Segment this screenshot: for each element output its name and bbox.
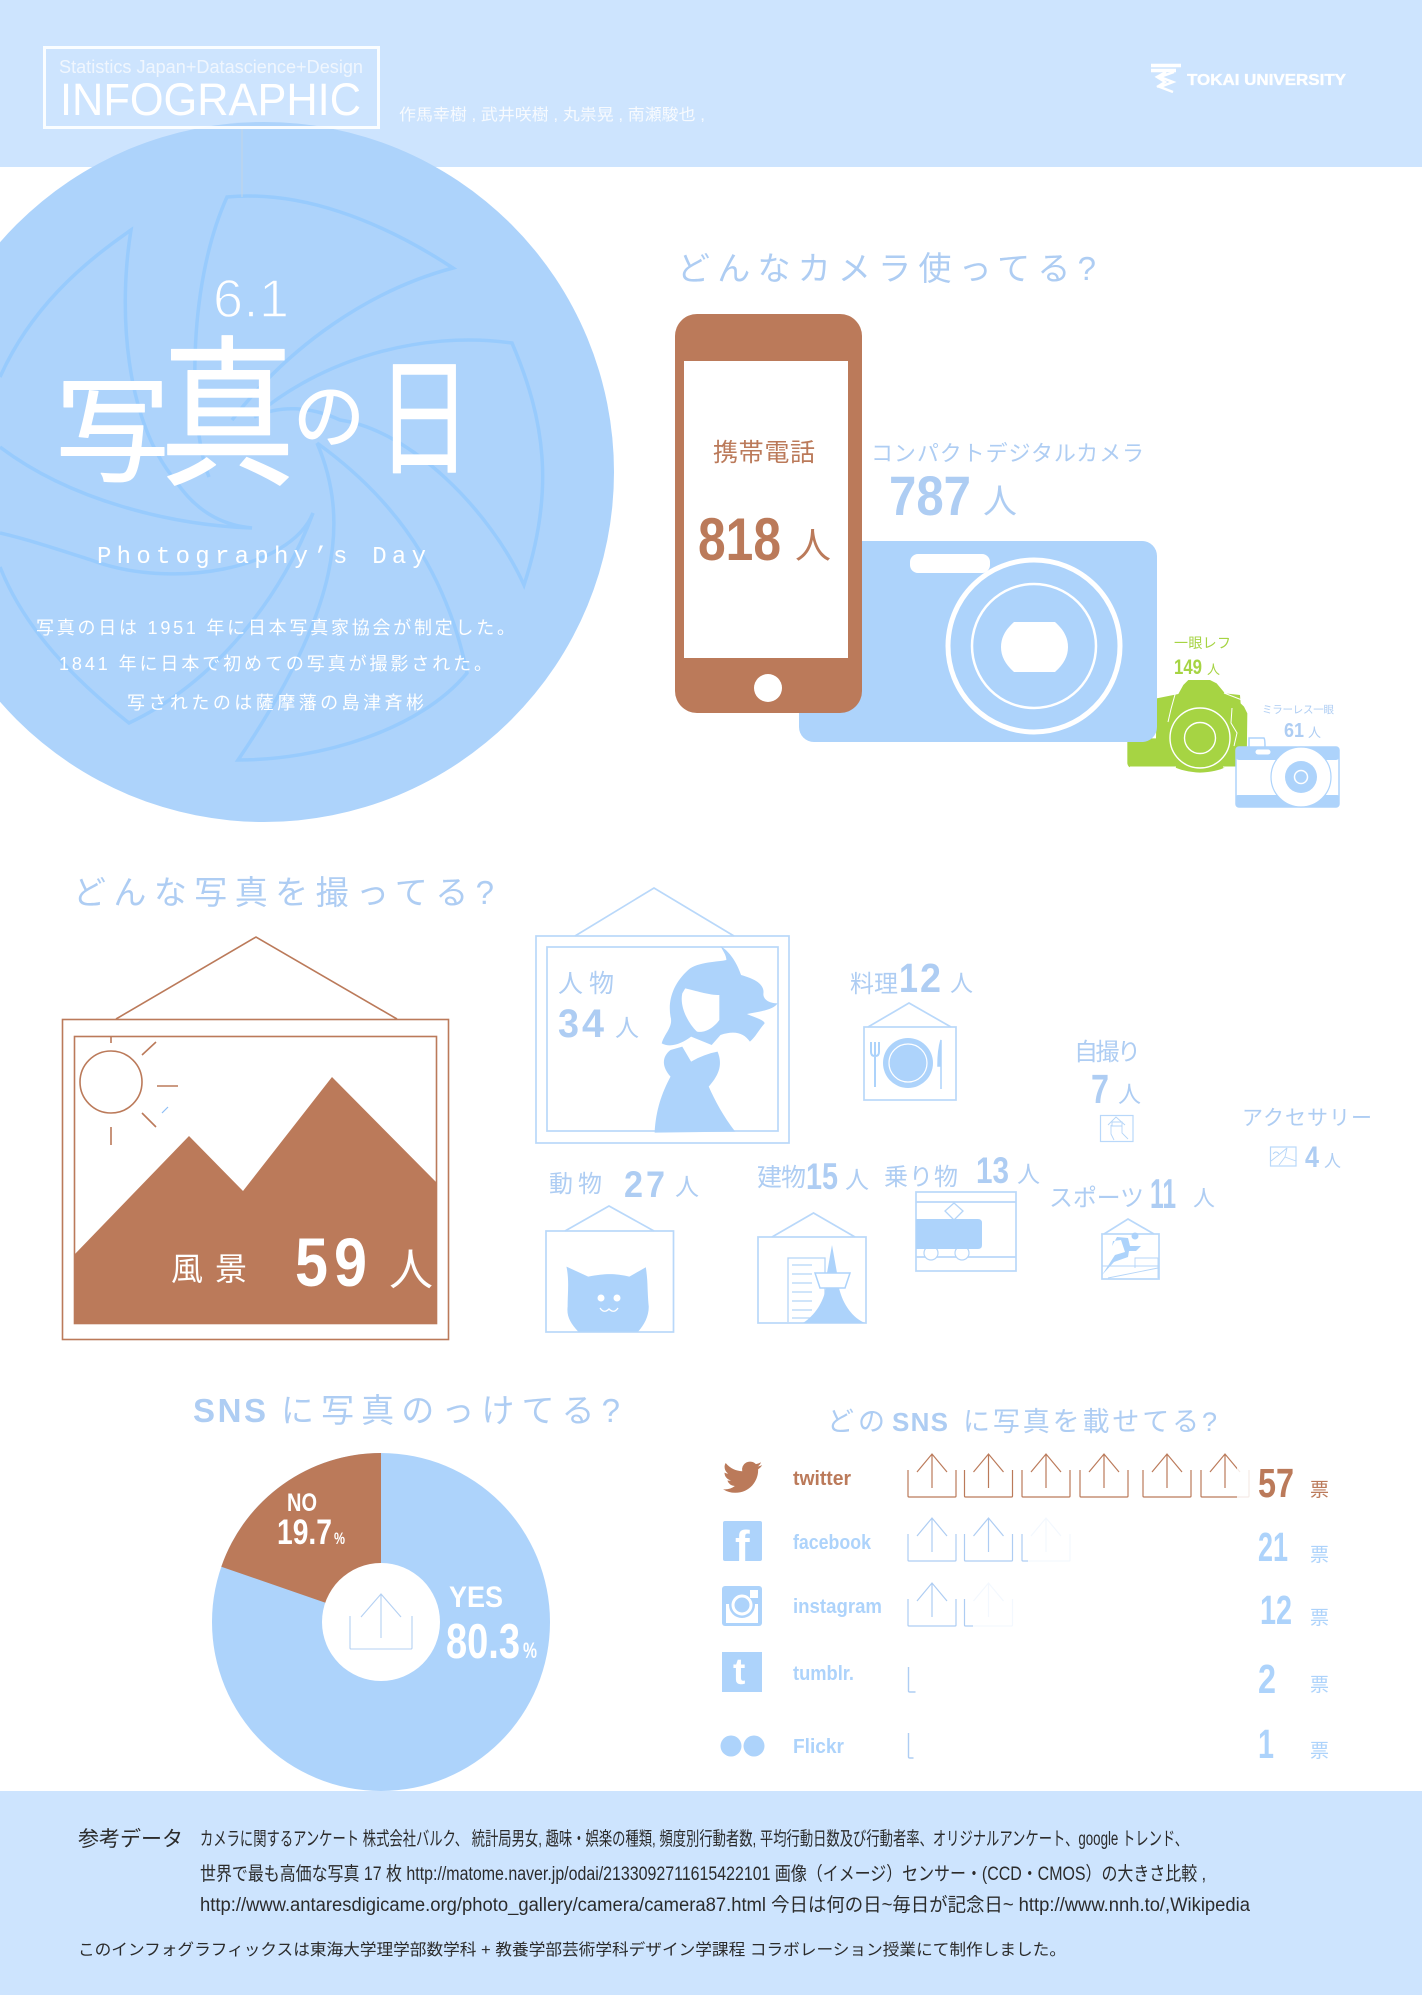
sports label: スポーツ xyxy=(1049,1185,1144,1212)
building label xyxy=(757,1156,869,1197)
row: tumblr: t xyxy=(733,1651,745,1692)
label: DSLR: 149 xyxy=(1174,656,1202,679)
row: twitter: 票 xyxy=(1310,1480,1329,1501)
landscape frame xyxy=(62,937,448,1340)
heading xyxy=(827,1407,1217,1437)
portrait label: 3 xyxy=(558,1002,579,1046)
row: tumblr: 票 xyxy=(1310,1675,1329,1696)
food label xyxy=(850,955,973,1001)
label: compact camera xyxy=(871,441,1144,527)
label: mobile phone: 818 xyxy=(698,506,781,573)
label: mirrorless xyxy=(1262,704,1334,742)
landscape label: 9 xyxy=(334,1224,367,1301)
accessory label: 人 xyxy=(1324,1152,1341,1171)
title 写真の日: の xyxy=(293,378,365,458)
accessory label: アクセサリー xyxy=(1242,1107,1372,1130)
description text: 写されたのは薩摩藩の島津斉彬 xyxy=(127,693,424,713)
icon: DSLR xyxy=(1127,680,1247,773)
label: compact camera: 787 xyxy=(889,464,971,527)
row: twitter: twitter xyxy=(793,1468,851,1490)
row: facebook xyxy=(723,1516,1329,1571)
animal label xyxy=(549,1164,699,1205)
description text: 写真の日は 1951 年に日本写真家協会が制定した。 xyxy=(36,618,515,638)
sports label: 11 xyxy=(1150,1170,1176,1217)
label: DSLR xyxy=(1174,635,1231,679)
title 写真の日: 写 xyxy=(55,369,170,497)
row: facebook: 21 xyxy=(1258,1524,1288,1570)
heading: SNS xyxy=(193,1392,266,1429)
panel: SNS yes/no xyxy=(193,1392,620,1791)
label: mobile phone: 携帯電話 xyxy=(713,439,815,467)
date 6.1: 6.1 xyxy=(213,269,289,329)
references xyxy=(78,1828,1250,1959)
silhouette xyxy=(655,946,778,1133)
panel: camera usage xyxy=(675,250,1339,807)
aperture circle xyxy=(0,122,614,822)
portrait label: 人 xyxy=(615,1015,639,1042)
logo title: INFOGRAPHIC xyxy=(60,74,361,125)
yes label: YES xyxy=(449,1581,503,1614)
heading: に写真を載せてる? xyxy=(963,1407,1217,1437)
vehicle label: 人 xyxy=(1017,1161,1040,1187)
description text xyxy=(36,618,515,713)
title 写真の日: 日 xyxy=(376,348,472,491)
row: tumblr xyxy=(722,1651,1329,1702)
label: mirrorless: ミラーレス一眼 xyxy=(1262,704,1334,716)
animal label: 人 xyxy=(675,1174,699,1201)
selfie frame xyxy=(1074,1039,1141,1142)
sports label xyxy=(1049,1170,1215,1217)
aperture blades xyxy=(0,196,543,760)
label: mobile phone xyxy=(698,439,831,573)
panel: photo subjects xyxy=(62,874,1372,1340)
yes label: % xyxy=(523,1638,537,1663)
heading: どんなカメラ使ってる? xyxy=(677,250,1096,287)
animal label: 7 xyxy=(646,1164,665,1205)
landscape label: 人 xyxy=(389,1246,433,1295)
landscape label xyxy=(171,1224,433,1301)
animal label: 動物 xyxy=(549,1171,602,1198)
selfie label: 人 xyxy=(1118,1081,1141,1107)
panel: aperture circle with title xyxy=(0,122,614,822)
footer band xyxy=(0,1791,1422,1995)
description text: 1841 年に日本で初めての写真が撮影された。 xyxy=(59,654,492,674)
row: instagram: 12 xyxy=(1260,1587,1292,1633)
pie chart xyxy=(212,1453,550,1791)
label: DSLR: 人 xyxy=(1207,662,1220,677)
building label: 人 xyxy=(845,1167,869,1194)
landscape label: 5 xyxy=(295,1224,328,1301)
label: mobile phone: 人 xyxy=(795,525,831,566)
title 写真の日 xyxy=(55,325,472,507)
food frame xyxy=(850,955,973,1100)
no label: 19.7 xyxy=(277,1513,332,1552)
selfie label xyxy=(1074,1039,1141,1112)
selfie label: 自撮り xyxy=(1074,1039,1141,1066)
portrait frame xyxy=(536,888,789,1143)
animal frame xyxy=(546,1164,699,1332)
sports label: 人 xyxy=(1193,1186,1215,1211)
heading: SNS xyxy=(892,1407,948,1437)
row: flickr: 1 xyxy=(1258,1721,1274,1767)
row: facebook: 票 xyxy=(1310,1545,1329,1566)
panel: SNS ranking xyxy=(720,1407,1329,1767)
no label: % xyxy=(334,1529,345,1548)
university logo: TOKAI UNIVERSITY xyxy=(1187,72,1347,89)
icon: smartphone xyxy=(675,314,862,713)
row: flickr xyxy=(720,1721,1329,1767)
authors: 作馬幸樹 , 武井咲樹 , 丸祟晃 , 南瀬駿也 , xyxy=(399,106,705,124)
row: twitter: 57 xyxy=(1258,1460,1294,1506)
food label: 2 xyxy=(920,955,941,1001)
yes label: 80.3 xyxy=(446,1615,520,1669)
food label: 人 xyxy=(950,970,973,996)
credit line: このインフォグラフィックスは東海大学理学部数学科 + 教養学部芸術学科デザイン学課程 コラボレーション授業にて制作しました。 xyxy=(78,1940,1066,1959)
vehicle label: 乗り物 xyxy=(884,1164,958,1191)
no label: NO xyxy=(287,1489,317,1517)
icon: upload xyxy=(350,1594,412,1649)
portrait label xyxy=(558,970,639,1046)
row: flickr: 票 xyxy=(1310,1741,1329,1762)
food label: 料理 xyxy=(850,971,898,998)
university logo xyxy=(1151,66,1347,92)
title 写真の日: 真 xyxy=(160,325,295,507)
building frame xyxy=(757,1156,869,1323)
references heading: 参考データ xyxy=(78,1828,183,1851)
icon: compact camera xyxy=(799,541,1157,742)
row: facebook: f xyxy=(735,1522,750,1571)
accessory label: 4 xyxy=(1305,1141,1319,1174)
selfie label: 7 xyxy=(1091,1066,1109,1112)
yes label xyxy=(446,1581,537,1669)
subtitle: Photography’s Day xyxy=(97,544,426,571)
animal label: 2 xyxy=(624,1164,643,1205)
row: instagram: instagram xyxy=(793,1596,882,1618)
portrait label: 4 xyxy=(582,1002,605,1046)
label: mirrorless: 人 xyxy=(1308,725,1321,740)
header logo box xyxy=(44,48,378,128)
references text: http://www.antaresdigicame.org/photo_gallery/camera/camera87.html 今日は何の日~毎日が記念日~ http://www.nnh.to/,Wikipedia xyxy=(200,1894,1250,1916)
row: instagram: 票 xyxy=(1310,1608,1329,1629)
heading: どの xyxy=(827,1407,885,1437)
vehicle label: 13 xyxy=(976,1150,1009,1191)
header band xyxy=(0,0,1422,167)
accessory label xyxy=(1242,1107,1372,1174)
row: tumblr: 2 xyxy=(1258,1656,1276,1702)
label: DSLR: 一眼レフ xyxy=(1174,635,1231,651)
row: flickr: Flickr xyxy=(793,1736,844,1758)
references text: 世界で最も高価な写真 17 枚 http://matome.naver.jp/odai/2133092711615422101 画像（イメージ）センサー・(CCD・CMOS）の大きさ比較 , xyxy=(200,1863,1206,1885)
food label: 1 xyxy=(899,955,918,1001)
row: tumblr: tumblr. xyxy=(793,1663,854,1685)
icon: mirrorless camera xyxy=(1236,738,1339,807)
label: mirrorless: 61 xyxy=(1284,720,1304,742)
building label: 建物 xyxy=(757,1164,806,1192)
portrait label: 人物 xyxy=(558,970,614,998)
sports frame xyxy=(1049,1170,1215,1279)
building label: 15 xyxy=(806,1156,838,1197)
row: facebook: facebook xyxy=(793,1532,872,1554)
heading: に写真のっけてる? xyxy=(281,1392,620,1429)
vehicle frame xyxy=(884,1150,1040,1271)
label: compact camera: コンパクトデジタルカメラ xyxy=(871,441,1144,466)
landscape label: 風景 xyxy=(171,1251,247,1287)
row: instagram xyxy=(722,1581,1329,1633)
logo subtitle: Statistics Japan+Datascience+Design xyxy=(59,57,363,77)
row: twitter xyxy=(723,1454,1329,1506)
heading: どんな写真を撮ってる? xyxy=(73,874,494,911)
label: compact camera: 人 xyxy=(983,483,1017,521)
vehicle label xyxy=(884,1150,1040,1191)
references text xyxy=(200,1828,1250,1916)
accessory frame xyxy=(1242,1107,1372,1174)
no label xyxy=(277,1489,345,1552)
